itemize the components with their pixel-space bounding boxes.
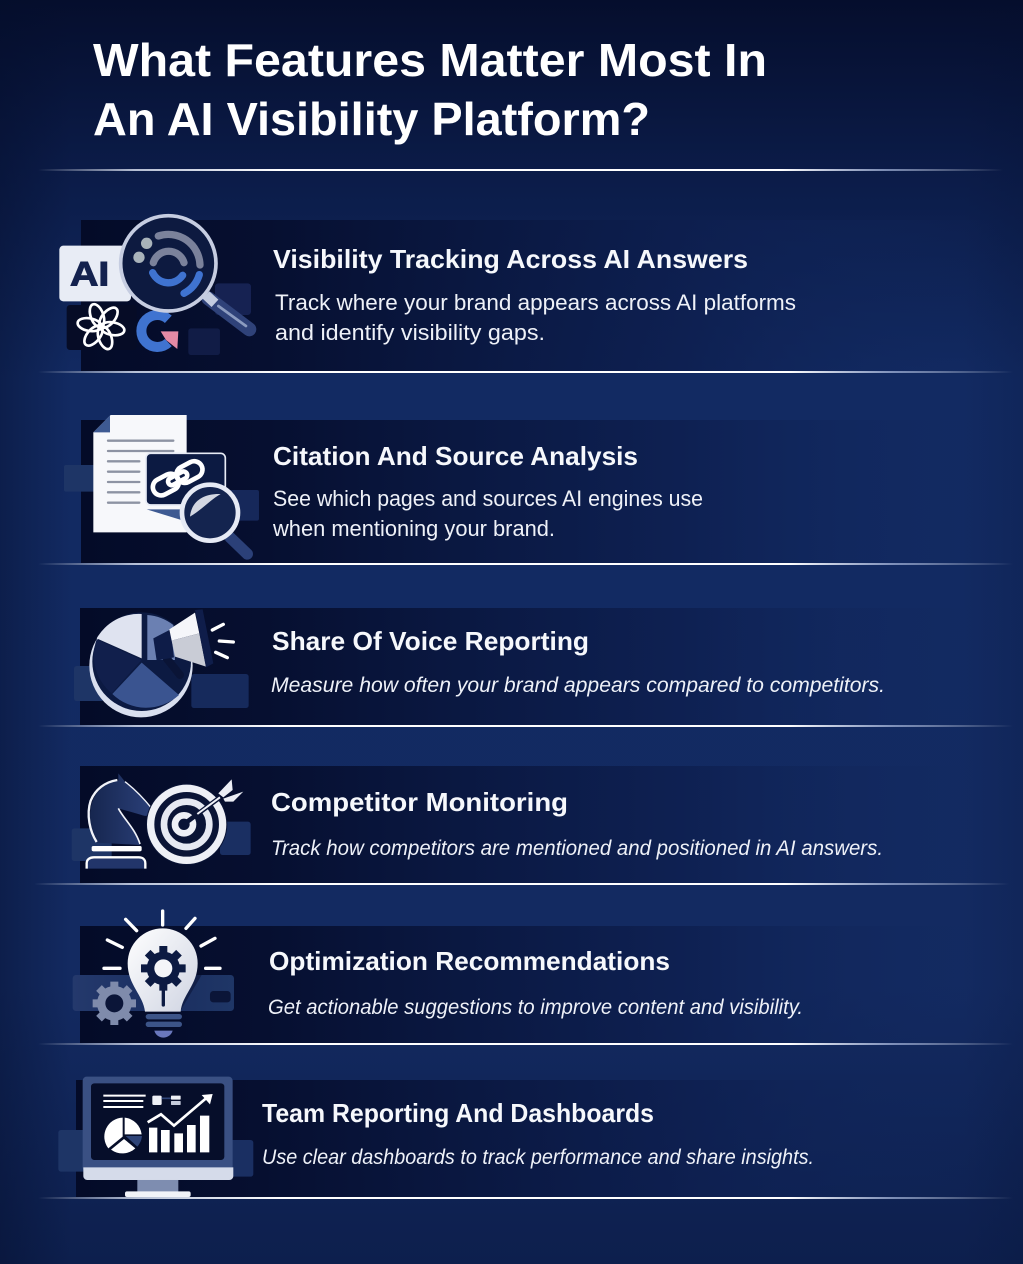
description: Track where your brand appears across AI platforms <box>275 290 796 315</box>
icon: dashboard monitor <box>58 1077 253 1197</box>
description: and identify visibility gaps. <box>275 320 545 345</box>
description: Use clear dashboards to track performance and share insights. <box>262 1146 814 1169</box>
heading: Competitor Monitoring <box>271 787 568 817</box>
description <box>275 290 796 345</box>
heading: Visibility Tracking Across AI Answers <box>273 244 748 274</box>
description: Measure how often your brand appears compared to competitors. <box>271 674 885 697</box>
panel: visibility tracking <box>38 216 1013 373</box>
heading: Citation And Source Analysis <box>273 441 638 471</box>
description: See which pages and sources AI engines use <box>273 486 703 511</box>
panel: competitor monitoring <box>34 766 1009 885</box>
heading: Optimization Recommendations <box>269 946 670 976</box>
heading: Team Reporting And Dashboards <box>262 1098 654 1128</box>
icon: chess knight and target <box>72 773 251 869</box>
icon: AI magnifier: AI <box>70 255 109 293</box>
heading: Share Of Voice Reporting <box>272 626 589 656</box>
panel: share of voice <box>38 608 1013 727</box>
icon: AI magnifier <box>59 216 251 355</box>
title <box>93 34 767 145</box>
description: Get actionable suggestions to improve content and visibility. <box>268 996 803 1019</box>
description: when mentioning your brand. <box>272 516 555 541</box>
panel: team reporting <box>38 1077 1013 1199</box>
title divider <box>38 169 1003 171</box>
panel: citation analysis <box>38 415 1013 565</box>
title: What Features Matter Most In <box>93 34 767 86</box>
icon: document with link and magnifier <box>64 415 259 554</box>
icon: pie chart and megaphone <box>74 609 249 717</box>
description <box>272 486 703 541</box>
description: Track how competitors are mentioned and positioned in AI answers. <box>271 837 883 860</box>
panel: optimization recommendations <box>38 911 1013 1045</box>
title: An AI Visibility Platform? <box>93 93 650 145</box>
icon: lightbulb with gears <box>73 911 234 1038</box>
